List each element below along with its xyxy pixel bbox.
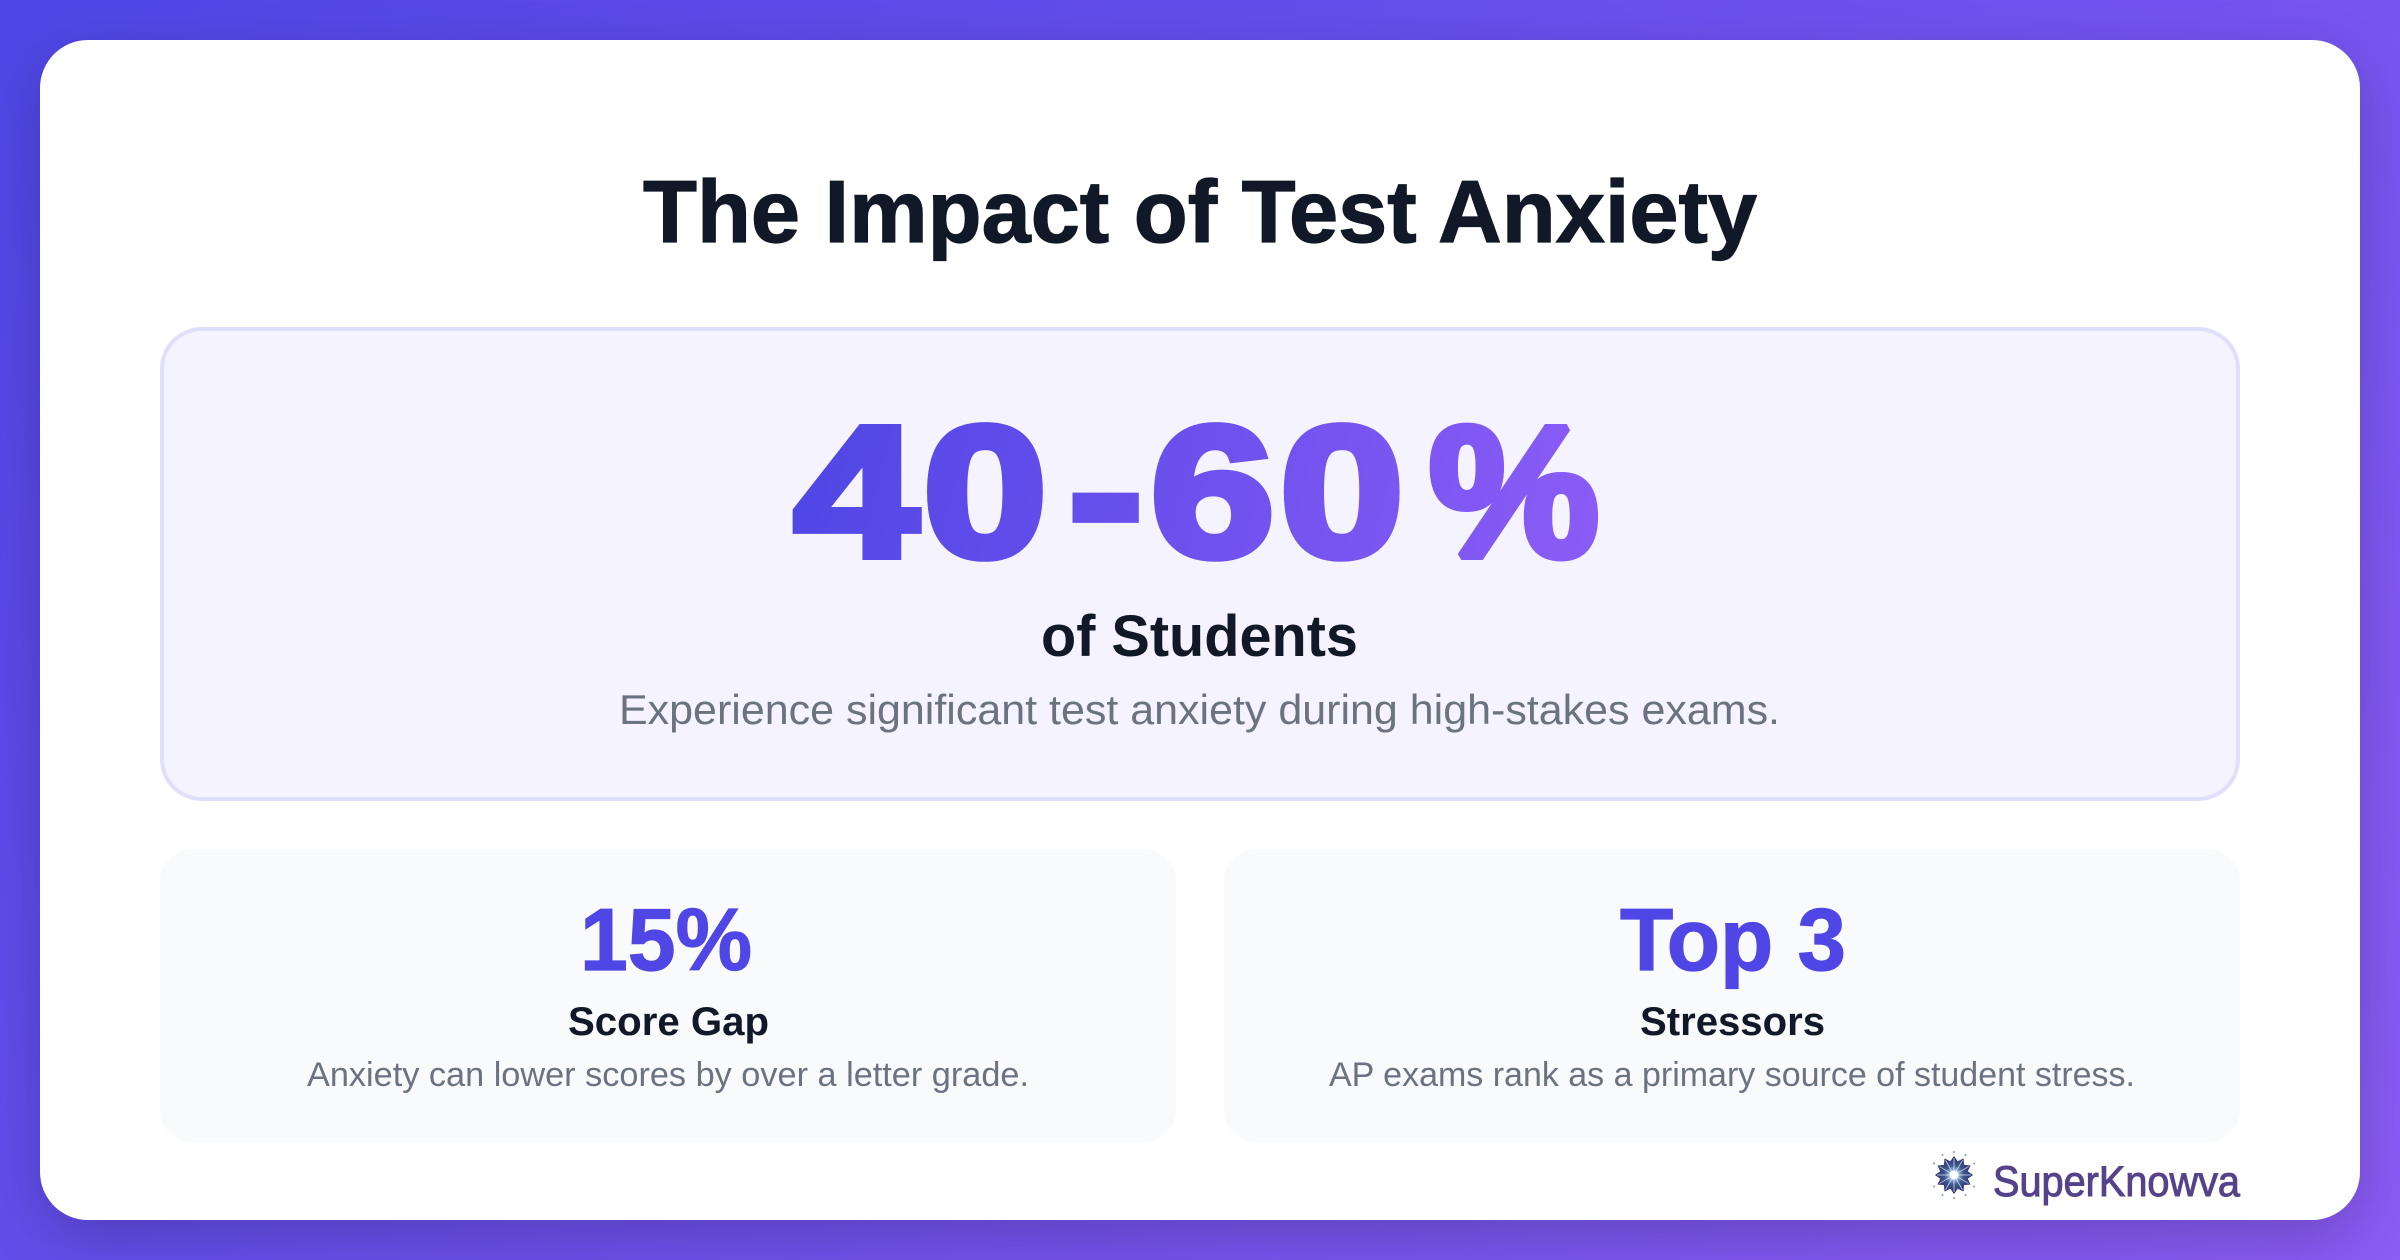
logo: SuperKnowva (1933, 1151, 2240, 1206)
panel: stressors (1224, 849, 2240, 1142)
icon: star (1933, 1151, 1975, 1199)
stressors description: AP exams rank as a primary source of student stress. (1329, 1056, 2135, 1094)
big number: % (1429, 389, 1599, 596)
big number: 40-60 (794, 388, 1404, 596)
stressors number: Top 3 (1620, 890, 1846, 989)
stressors label: Stressors (1640, 1000, 1825, 1044)
score gap label: Score Gap (568, 1000, 769, 1044)
brand name: SuperKnowva (1993, 1158, 2240, 1206)
score gap number: 15% (580, 890, 752, 989)
panel: score gap (160, 849, 1176, 1142)
score gap description: Anxiety can lower scores by over a letter grade. (307, 1056, 1029, 1094)
hero label: of Students (1041, 604, 1358, 669)
title: The Impact of Test Anxiety (643, 162, 1757, 261)
panel: hero statistic (162, 329, 2238, 799)
hero description: Experience significant test anxiety during high-stakes exams. (619, 686, 1780, 733)
